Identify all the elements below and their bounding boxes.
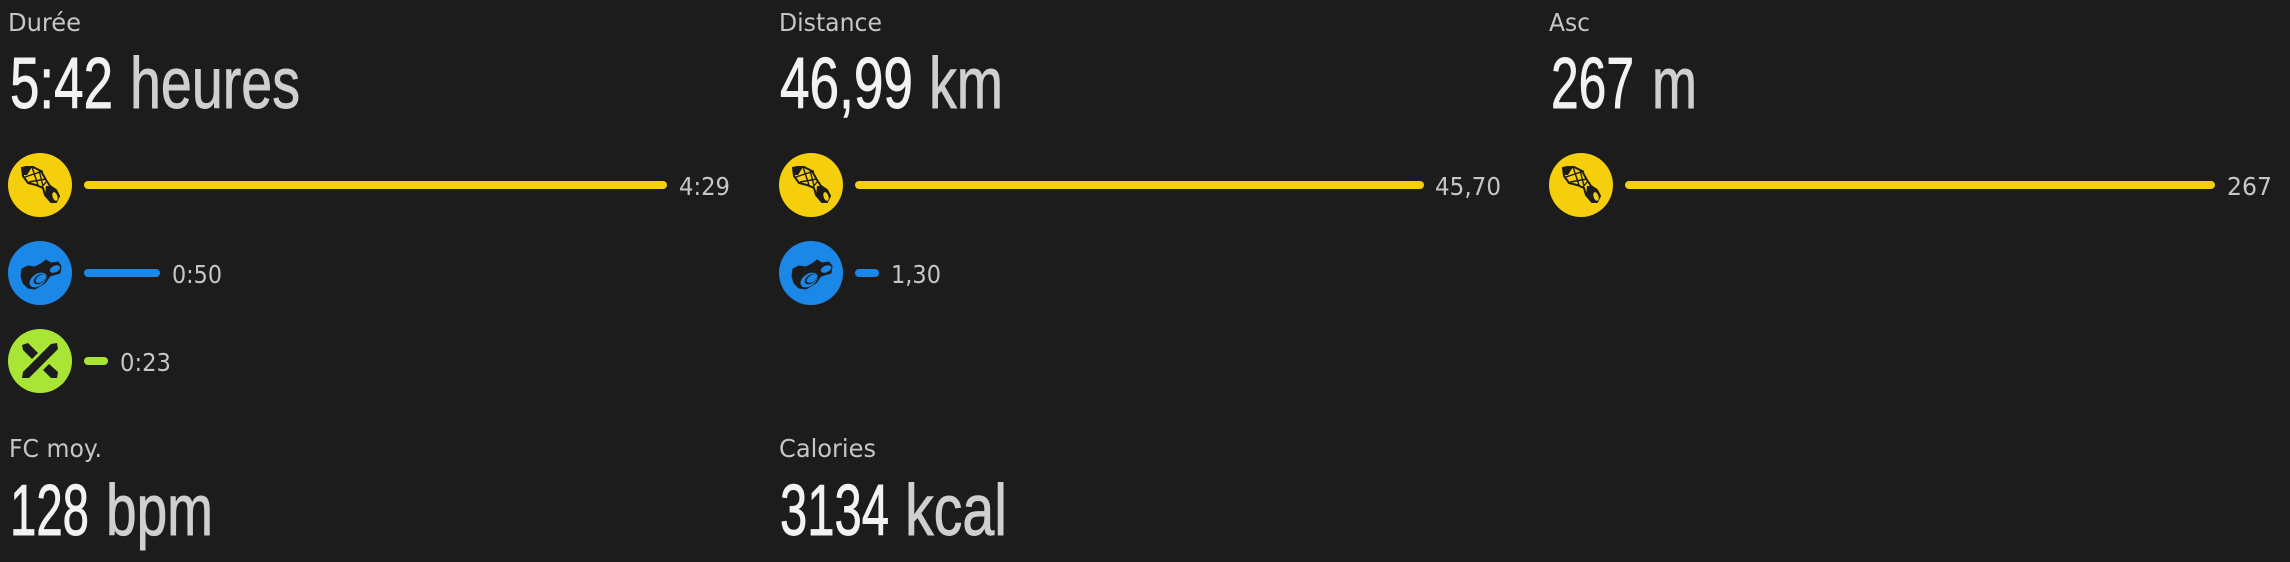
panel: durée: [8, 8, 730, 393]
unit: m: m: [1652, 44, 1697, 124]
value: 0:50: 0:50: [172, 260, 222, 289]
icon: running shoe: [779, 153, 843, 217]
panel: calories: [779, 434, 1007, 551]
bar: run duration: [84, 181, 667, 189]
bar: other duration: [84, 357, 108, 365]
unit: heures: heures: [130, 44, 300, 124]
value: 267 detail: 267: [2227, 172, 2272, 201]
value: 3134: 3134: [780, 471, 889, 551]
bar: bike duration: [84, 269, 160, 277]
value: 5:42: 5:42: [10, 44, 113, 124]
icon: running shoe: [8, 153, 72, 217]
bar: run distance: [855, 181, 1424, 189]
label: calories: Calories: [779, 434, 876, 463]
panel: ascent: [1549, 8, 2272, 217]
label: durée: Durée: [8, 8, 81, 37]
value: 128: 128: [10, 471, 89, 551]
value: 45,70: 45,70: [1435, 172, 1501, 201]
panel: distance: [779, 8, 1501, 305]
label: fc moy: FC moy.: [9, 434, 102, 463]
value: 267: 267: [1551, 44, 1634, 124]
unit: km: km: [929, 44, 1003, 124]
icon: running shoe: [1549, 153, 1613, 217]
icon: bike shoe: [779, 241, 843, 305]
unit: kcal: kcal: [905, 471, 1007, 551]
bar: run ascent: [1625, 181, 2215, 189]
value: 1,30: 1,30: [891, 260, 941, 289]
value: 4:29: 4:29: [679, 172, 730, 201]
icon: crossed tools: [8, 329, 72, 393]
bar: bike distance: [855, 269, 879, 277]
label: distance: Distance: [779, 8, 882, 37]
value: 46,99: 46,99: [780, 44, 913, 124]
panel: average heart rate: [9, 434, 213, 551]
unit: bpm: bpm: [106, 471, 213, 551]
value: 0:23: 0:23: [120, 348, 171, 377]
icon: bike shoe: [8, 241, 72, 305]
label: asc: Asc: [1549, 8, 1590, 37]
